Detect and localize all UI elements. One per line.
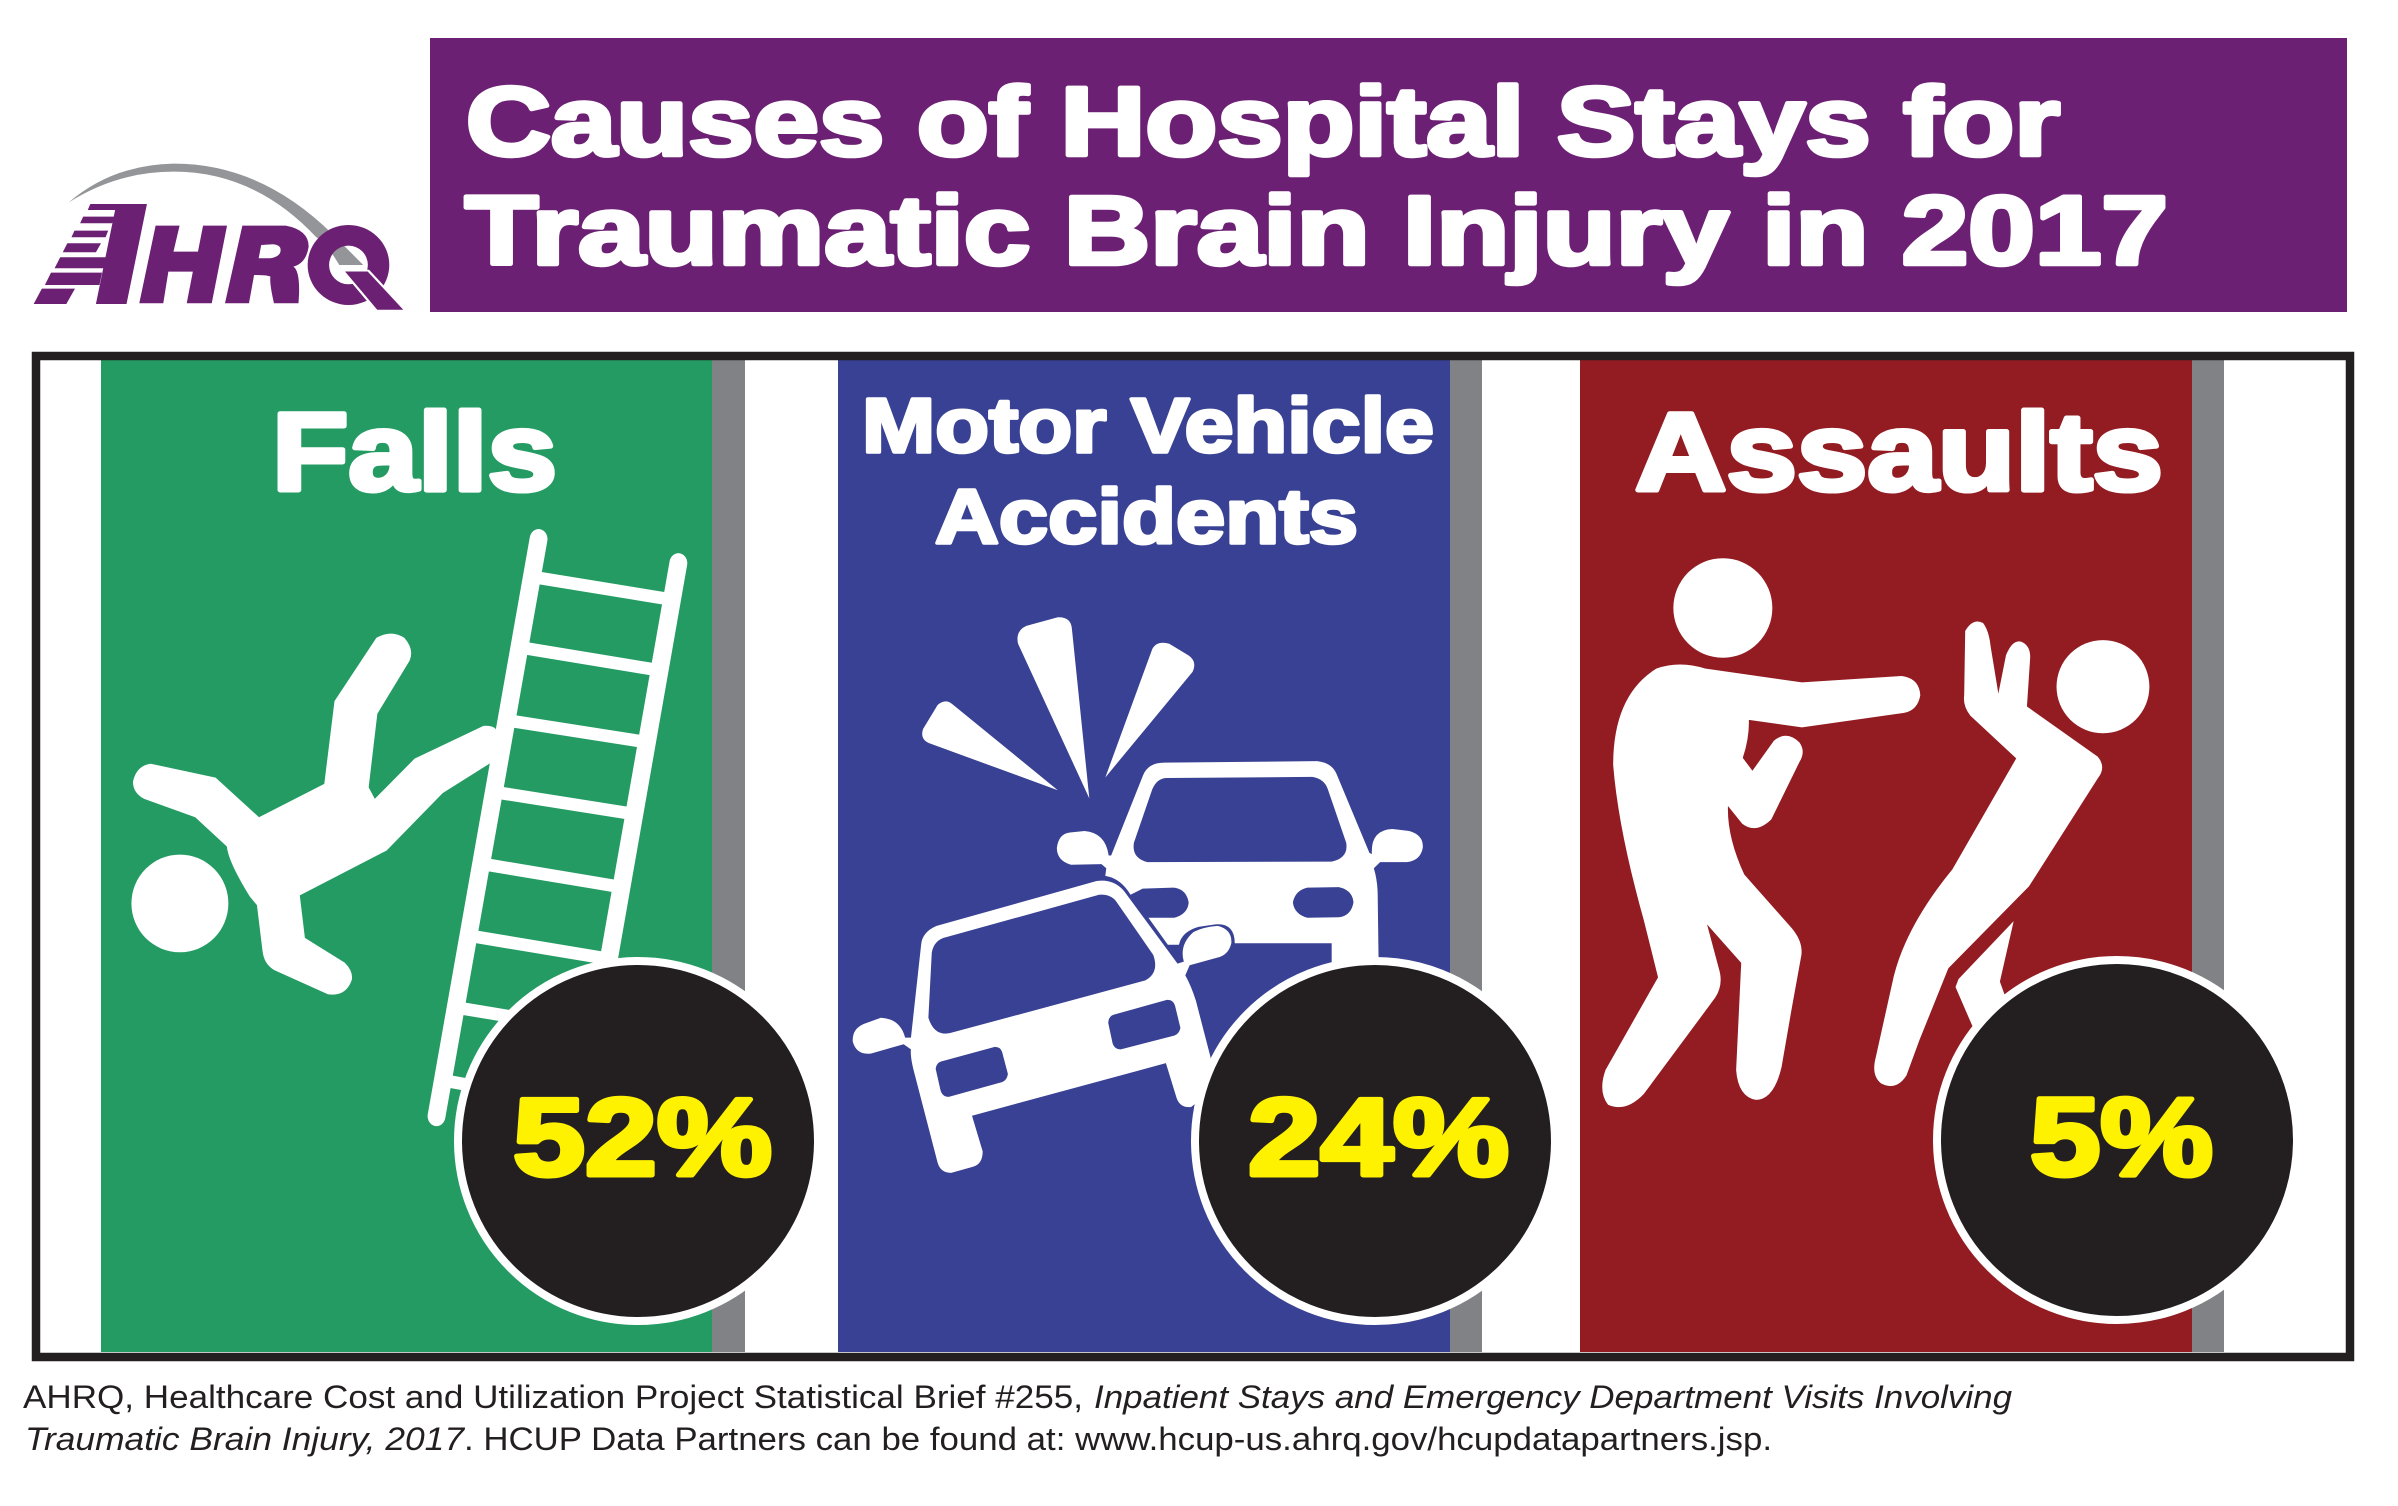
source note: Inpatient Stays and Emergency Department Visits Involving <box>1094 1379 2012 1415</box>
icon: person punching another person <box>1602 558 2149 1107</box>
source note <box>23 1379 2012 1457</box>
heading: Falls: Falls <box>272 391 557 514</box>
stat circle: 52% <box>458 961 818 1321</box>
heading: Motor Vehicle Accidents <box>862 383 1434 560</box>
source note: . HCUP Data Partners can be found at: www.hcup-us.ahrq.gov/hcupdatapartners.jsp. <box>464 1421 1772 1457</box>
stat circle: 52%: 52% <box>513 1076 772 1199</box>
stat circle: 24% <box>1195 961 1555 1321</box>
stat circle: 5%: 5% <box>2030 1076 2213 1199</box>
title banner <box>430 38 2347 312</box>
source note: Traumatic Brain Injury, 2017 <box>25 1421 465 1457</box>
stat circle: 24%: 24% <box>1248 1076 1509 1199</box>
heading: Assaults: Assaults <box>1635 391 2163 514</box>
title line 1: Causes of Hospital Stays for <box>466 67 2060 176</box>
panel: motor vehicle accidents <box>838 360 1555 1352</box>
heading: Motor Vehicle Accidents: Motor Vehicle <box>862 383 1434 469</box>
panel: assaults <box>1580 360 2297 1352</box>
stat circle: 5% <box>1937 960 2297 1320</box>
icon: two cars crashing <box>853 617 1423 1173</box>
panel: falls <box>101 360 818 1352</box>
title line 2: Traumatic Brain Injury in 2017 <box>465 176 2168 285</box>
logo: AHRQ <box>34 164 406 311</box>
heading: Motor Vehicle Accidents: Accidents <box>935 474 1358 560</box>
panel frame <box>36 356 2350 1357</box>
source note: AHRQ, Healthcare Cost and Utilization Project Statistical Brief #255, <box>23 1379 1083 1415</box>
icon: person falling from ladder <box>131 539 678 1116</box>
